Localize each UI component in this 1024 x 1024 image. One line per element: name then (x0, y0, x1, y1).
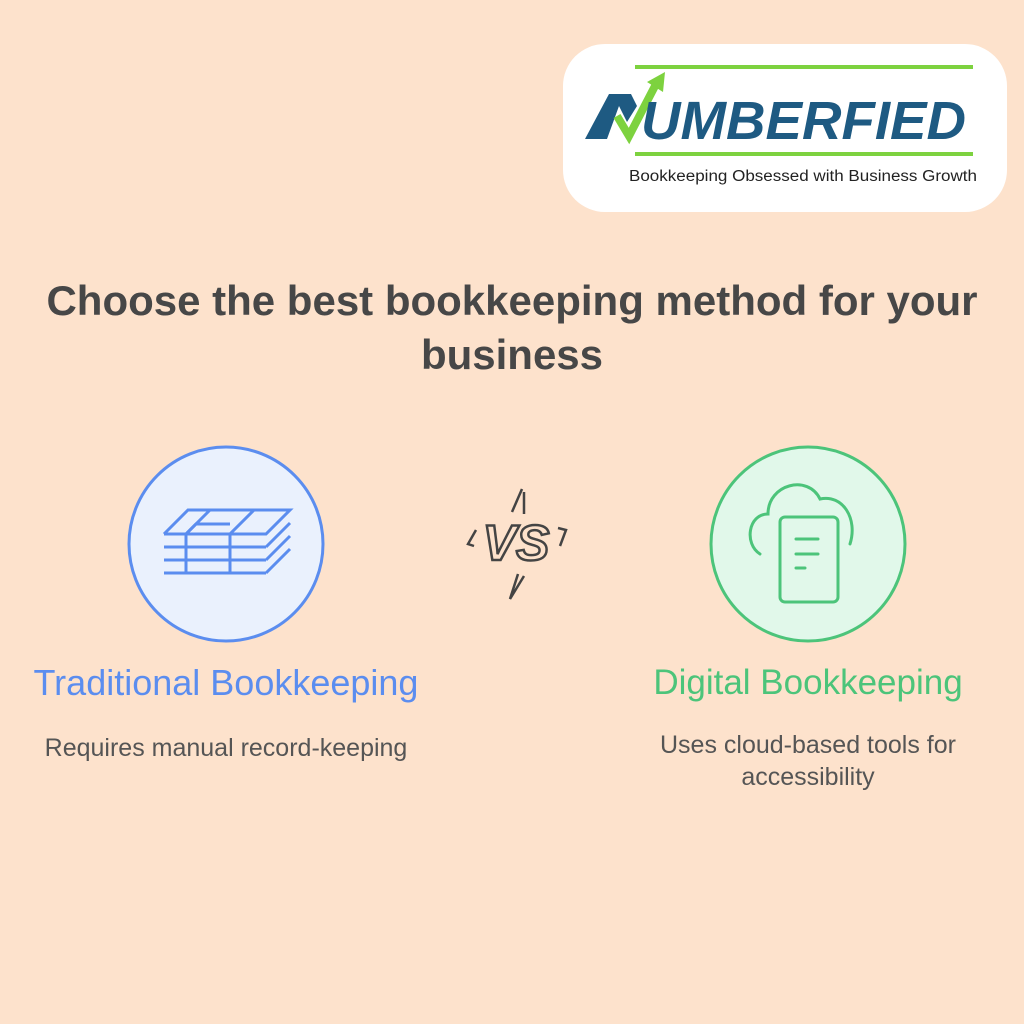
heading: traditional: Traditional Bookkeeping (34, 662, 418, 703)
logo mark (585, 72, 665, 139)
logo lines (635, 65, 973, 156)
heading: digital: Digital Bookkeeping (653, 663, 963, 702)
text: digital description (660, 731, 956, 791)
logo card (563, 44, 1007, 212)
text: digital description: accessibility (741, 763, 875, 791)
icon: digital bookkeeping circle (710, 446, 906, 642)
tagline: Bookkeeping Obsessed with Business Growth (629, 168, 977, 185)
icon: traditional bookkeeping circle (128, 446, 324, 642)
title: Choose the best bookkeeping method for your business (46, 277, 978, 378)
text: digital description: Uses cloud-based tools for (660, 731, 956, 759)
text: traditional description: Requires manual record-keeping (45, 734, 407, 762)
icon: vs: VS (483, 515, 549, 571)
icon: vs (466, 488, 568, 600)
logo wordmark: UMBERFIED (641, 91, 966, 151)
